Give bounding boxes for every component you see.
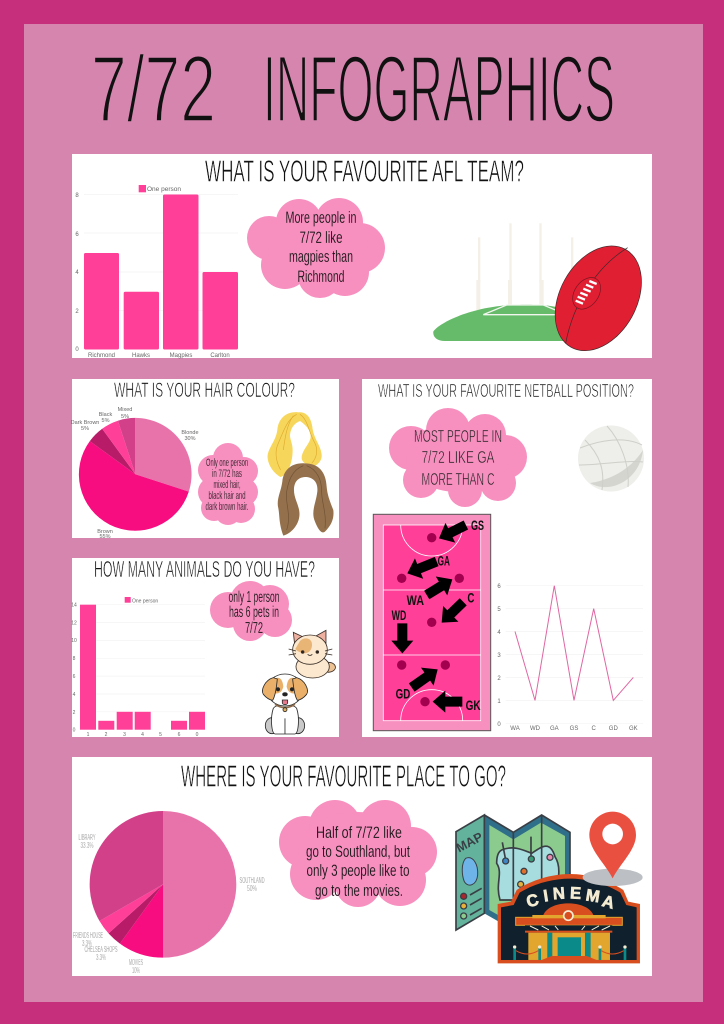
pie chart: places: SOUTHLAND <box>240 876 265 885</box>
icon: cinema: I <box>542 886 550 906</box>
arrows and position labels: GK <box>466 697 481 713</box>
bar chart: animals: 4 <box>141 732 144 738</box>
callout: Southland: only 3 people like to <box>306 862 410 880</box>
icon: cat <box>289 630 335 678</box>
line chart: netball positions <box>497 584 643 732</box>
callout: GA: MOST PEOPLE IN <box>414 426 502 446</box>
pie chart: places: 3.3% <box>82 939 92 948</box>
panel: number of animals <box>71 556 339 738</box>
line chart: netball positions: WA <box>510 726 520 732</box>
icon: wigs <box>268 412 334 536</box>
callout: Southland <box>279 800 437 907</box>
title: 7/72 <box>91 36 216 142</box>
callout: hair: dark brown hair. <box>206 501 248 513</box>
callout: magpies: More people in <box>286 208 356 227</box>
bar chart: AFL teams: 4 <box>75 270 79 276</box>
pie chart: hair colour: 30% <box>184 436 196 442</box>
line chart: netball positions: 5 <box>497 607 501 613</box>
line chart: netball positions: 2 <box>497 676 501 682</box>
pie chart: hair colour: Brown <box>97 529 113 535</box>
bar chart: animals: 8 <box>73 656 76 662</box>
bar chart: AFL teams: Hawks <box>132 353 150 359</box>
icon: dog <box>263 674 307 734</box>
icon: location pin <box>583 812 643 886</box>
bar chart: animals: 10 <box>71 638 77 644</box>
pie chart: hair colour: 5% <box>81 426 89 432</box>
bar chart: animals: 1 <box>87 732 90 738</box>
bar chart: animals: 6 <box>178 732 181 738</box>
callout: hair: mixed hair, <box>214 479 240 491</box>
bar chart: animals: 12 <box>71 620 77 626</box>
callout: pets: has 6 pets in <box>229 604 279 621</box>
line chart: netball positions: WD <box>530 726 541 732</box>
pie chart: hair colour: Dark Brown <box>71 420 99 426</box>
callout: magpies: magpies than <box>289 247 353 266</box>
panel: netball position <box>362 379 652 737</box>
callout: magpies <box>247 198 385 298</box>
pie chart: places: CHELSEA SHOPS <box>84 945 118 954</box>
bar chart: animals: One person <box>132 598 158 604</box>
callout: Southland: Half of 7/72 like <box>316 824 402 842</box>
panel: hair colour <box>71 378 339 540</box>
bar chart: AFL teams: 0 <box>75 347 79 353</box>
icon: cinema: E <box>570 883 582 903</box>
callout: Southland: go to Southland, but <box>306 843 410 861</box>
bar chart: AFL teams: 2 <box>75 309 79 315</box>
icon: cinema <box>498 874 640 963</box>
arrows and position labels: GA <box>438 553 450 569</box>
bar chart: animals: 0 <box>73 728 76 734</box>
bar chart: animals: 14 <box>71 602 77 608</box>
bar chart: animals: 5 <box>159 732 162 738</box>
pie chart: places: FRIENDS HOUSE <box>73 931 103 940</box>
panel: favourite AFL team <box>72 153 659 366</box>
callout: pets <box>210 581 292 641</box>
bar chart: animals: 2 <box>73 710 76 716</box>
pie chart: places <box>73 811 265 975</box>
heading: animals: HOW MANY ANIMALS DO YOU HAVE? <box>94 556 315 582</box>
line chart: netball positions: 6 <box>497 584 501 590</box>
pie chart: hair colour: 5% <box>102 418 110 424</box>
heading: hair: WHAT IS YOUR HAIR COLOUR? <box>114 378 295 402</box>
icon: netball <box>578 426 644 492</box>
bar chart: AFL teams <box>75 185 238 359</box>
pie chart: hair colour: 5% <box>121 414 129 420</box>
icon: cinema: A <box>600 891 617 913</box>
icon: cinema: M <box>585 885 601 906</box>
callout: Southland: go to the movies. <box>315 882 403 900</box>
line chart: netball positions: C <box>592 726 597 732</box>
callout: magpies: 7/72 like <box>300 228 342 247</box>
callout: hair: black hair and <box>208 490 246 502</box>
pie chart: places: 10% <box>132 966 140 975</box>
title <box>91 36 615 142</box>
callout: pets: 7/72 <box>245 620 263 637</box>
pie chart: hair colour: Black <box>99 412 112 418</box>
callout: GA: MORE THAN C <box>422 469 494 489</box>
pie chart: hair colour: Blonde <box>181 430 199 436</box>
pie chart: hair colour: 55% <box>99 534 111 540</box>
pie chart: hair colour: Mixed <box>118 407 132 413</box>
bar chart: animals: 0 <box>196 732 199 738</box>
arrows and position labels: C <box>467 590 474 606</box>
pie chart: places: 33.3% <box>80 841 94 850</box>
callout: hair: in 7/72 has <box>212 468 242 480</box>
line chart: netball positions: 1 <box>497 699 501 705</box>
icon: cinema: C <box>524 890 541 911</box>
icon: folded map <box>454 815 570 930</box>
bar chart: AFL teams: Magpies <box>170 353 192 359</box>
arrows and position labels: WD <box>392 607 406 623</box>
bar chart: animals: 3 <box>123 732 126 738</box>
panel: favourite place <box>72 757 652 976</box>
line chart: netball positions: 0 <box>497 722 501 728</box>
icon: football oval and ball <box>433 223 659 366</box>
line chart: netball positions: 4 <box>497 630 501 636</box>
bar chart: animals: 2 <box>105 732 108 738</box>
callout: pets: only 1 person <box>228 589 280 606</box>
bar chart: AFL teams: One person <box>147 186 181 193</box>
pie chart: places: 50% <box>247 884 257 893</box>
callout: hair: Only one person <box>206 457 248 469</box>
line chart: netball positions: GK <box>629 726 638 732</box>
line chart: netball positions: GA <box>550 726 559 732</box>
icon: folded map: MAP <box>454 829 486 855</box>
callout: GA <box>389 408 527 507</box>
arrows and position labels <box>391 515 484 713</box>
line chart: netball positions: GS <box>570 726 578 732</box>
line chart: netball positions: GD <box>609 726 618 732</box>
pie chart: places: LIBRARY <box>78 833 96 842</box>
pie chart: places: 3.3% <box>96 953 106 962</box>
callout: magpies: Richmond <box>298 267 344 286</box>
diagram: netball court <box>373 514 491 731</box>
arrows and position labels: WA <box>407 592 424 608</box>
arrows and position labels: GD <box>396 686 410 702</box>
pie chart: places: MOVIES <box>129 958 143 967</box>
bar chart: animals <box>71 597 205 738</box>
bar chart: AFL teams: Richmond <box>88 353 115 359</box>
line chart: netball positions: 3 <box>497 653 501 659</box>
bar chart: AFL teams: 8 <box>75 193 79 199</box>
bar chart: AFL teams: 6 <box>75 232 79 238</box>
pie chart: hair colour <box>71 407 199 540</box>
callout: GA: 7/72 LIKE GA <box>422 447 495 467</box>
bar chart: animals: 4 <box>73 692 76 698</box>
bar chart: animals: 6 <box>73 674 76 680</box>
bar chart: AFL teams: Carlton <box>210 353 230 359</box>
icon: cinema: N <box>552 884 566 903</box>
arrows and position labels: GS <box>471 517 484 533</box>
callout: hair <box>198 443 258 525</box>
